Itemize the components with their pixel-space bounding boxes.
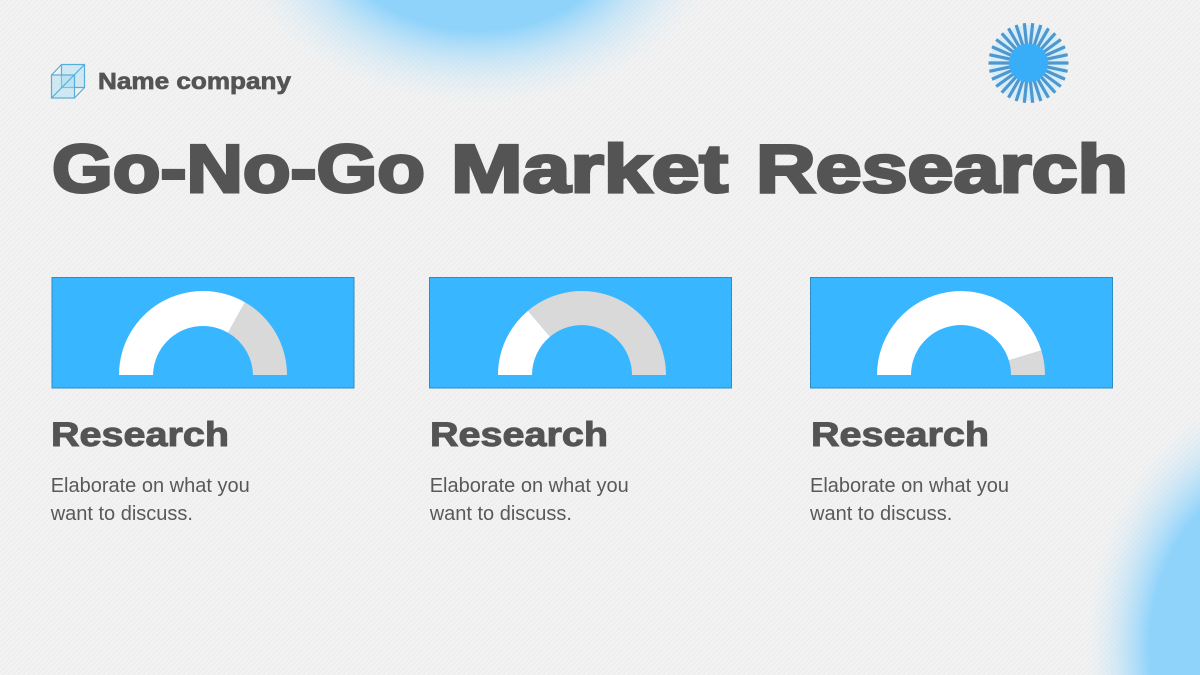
icon: blue starburst (988, 23, 1068, 103)
icon: wireframe cube logo (52, 64, 84, 98)
panel: research 2 (429, 278, 732, 525)
body text 1: want to discuss. (50, 503, 193, 525)
panel: research 3 (809, 278, 1112, 525)
gauge 1: grey segment (228, 302, 287, 375)
gauge panel 2 background (430, 278, 732, 388)
gauge panel 3 background (810, 278, 1112, 388)
body text 2: Elaborate on what you (430, 475, 629, 497)
gauge 1: white segment (119, 291, 245, 375)
gauge panel 1 background (52, 278, 354, 388)
body text 1: Elaborate on what you (51, 475, 250, 497)
body text 3: Elaborate on what you (810, 475, 1009, 497)
title: Go-No-Go (52, 131, 425, 207)
body text 3: want to discuss. (809, 503, 952, 525)
company name: Name company (98, 68, 291, 94)
title: Market (451, 131, 728, 207)
heading 2: Research (430, 416, 608, 454)
gauge 2: grey segment (528, 291, 666, 375)
title (52, 131, 1128, 207)
heading 3: Research (811, 416, 989, 454)
title: Research (756, 131, 1128, 207)
gauge 3: grey segment (1009, 350, 1045, 375)
gauge 3: white segment (877, 291, 1041, 375)
blurred blue blob: top (233, 0, 723, 105)
heading 1: Research (51, 416, 229, 454)
panel: research 1 (50, 278, 354, 525)
body text 2: want to discuss. (429, 503, 572, 525)
gauge 2: white segment (498, 311, 550, 375)
blurred blue blob: bottom right (1085, 390, 1200, 675)
